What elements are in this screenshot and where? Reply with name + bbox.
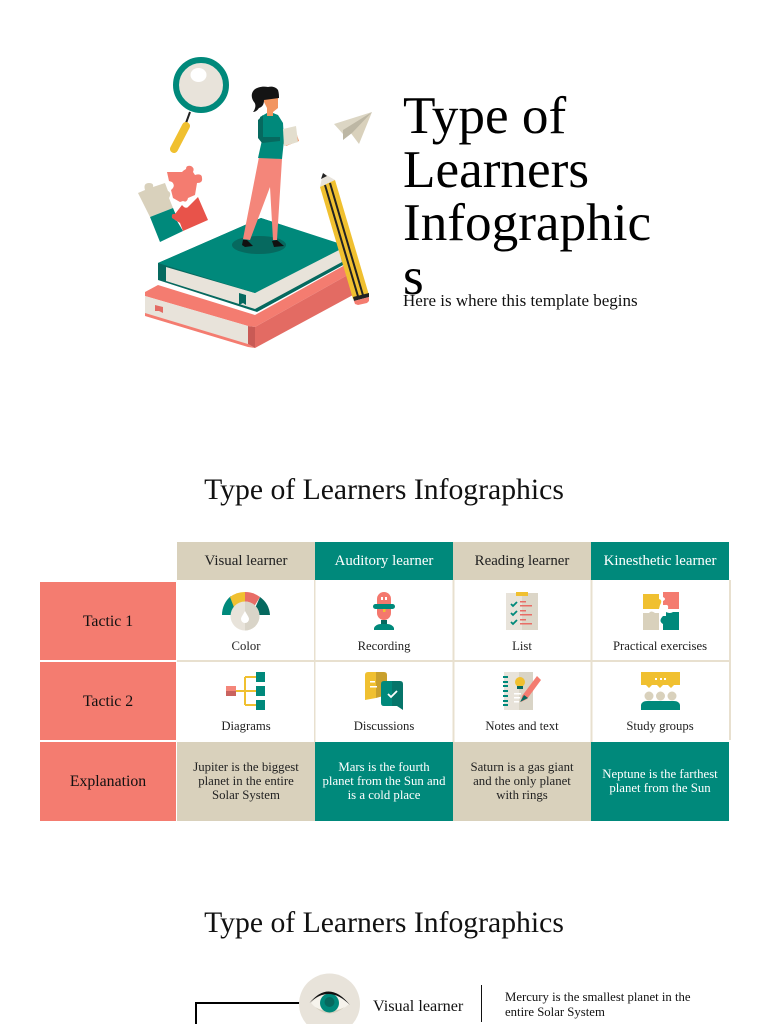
explanation: reading: with rings [496, 788, 548, 802]
explanation: kinesthetic: planet from the Sun [609, 781, 711, 795]
column header: auditory [315, 542, 453, 580]
girl [242, 87, 299, 247]
row header: tactic 2 [40, 662, 176, 740]
label: notes and text: Notes and text [485, 719, 559, 733]
title: s [403, 246, 424, 306]
heading: table section: Type of Learners Infographics [204, 474, 564, 506]
explanation: reading: Saturn is a gas giant [470, 760, 574, 774]
row header: explanation [40, 742, 176, 821]
icon: discussion bubbles [365, 672, 403, 710]
label: study groups: Study groups [626, 719, 694, 733]
label: discussions: Discussions [354, 719, 414, 733]
pencil [320, 173, 369, 305]
title: Infographic [403, 193, 651, 252]
puzzle [138, 166, 208, 242]
row header: tactic 1: Tactic 1 [83, 612, 133, 630]
explanation: visual [177, 742, 315, 821]
icon: color gauge [222, 592, 270, 630]
column header: auditory: Auditory learner [335, 552, 433, 568]
explanation: reading: and the only planet [473, 774, 571, 788]
label: color: Color [232, 639, 260, 653]
column header: reading: Reading learner [475, 552, 569, 568]
explanation: auditory: is a cold place [348, 788, 420, 802]
icon: checklist [506, 592, 538, 630]
label: recording: Recording [358, 639, 410, 653]
label: list: List [512, 639, 532, 653]
explanation: auditory [315, 742, 453, 821]
explanation: visual: Jupiter is the biggest [193, 760, 299, 774]
illustration: girl standing on books [138, 57, 372, 348]
explanation: kinesthetic [591, 742, 729, 821]
text: mercury description [505, 990, 691, 1019]
row header: tactic 1 [40, 582, 176, 660]
magnifying glass [174, 60, 226, 149]
column header: kinesthetic: Kinesthetic learner [604, 552, 716, 568]
explanation: auditory: planet from the Sun and [323, 774, 445, 788]
icon: recording microphone [373, 592, 395, 630]
icon: puzzle pieces [643, 592, 679, 630]
icon: study group [641, 672, 680, 710]
column header: visual [177, 542, 315, 580]
explanation: auditory: Mars is the fourth [338, 760, 430, 774]
title: Learners [403, 140, 589, 198]
text: mercury description: Mercury is the smallest planet in the [505, 990, 691, 1004]
divider [481, 985, 482, 1022]
explanation: visual: Solar System [212, 788, 280, 802]
title [403, 86, 651, 306]
icon: notes and pencil [503, 672, 541, 710]
row header: explanation: Explanation [70, 773, 146, 790]
label: visual learner: Visual learner [373, 997, 463, 1015]
explanation: visual: planet in the entire [198, 774, 294, 788]
title: Type of [403, 86, 566, 145]
column header: reading [453, 542, 591, 580]
row header: tactic 2: Tactic 2 [83, 692, 133, 710]
heading: second section: Type of Learners Infographics [204, 907, 564, 939]
label: diagrams: Diagrams [221, 719, 271, 733]
explanation: kinesthetic: Neptune is the farthest [602, 767, 718, 781]
subtitle: Here is where this template begins [403, 291, 638, 310]
green and red books [145, 218, 353, 348]
column header: visual: Visual learner [204, 552, 288, 568]
paper plane [334, 112, 372, 144]
icon: diagrams tree [226, 672, 265, 710]
explanation: reading [453, 742, 591, 821]
column header: kinesthetic [591, 542, 729, 580]
label: practical exercises: Practical exercises [613, 639, 707, 653]
text: mercury description: entire Solar System [505, 1005, 605, 1019]
table [40, 542, 731, 821]
